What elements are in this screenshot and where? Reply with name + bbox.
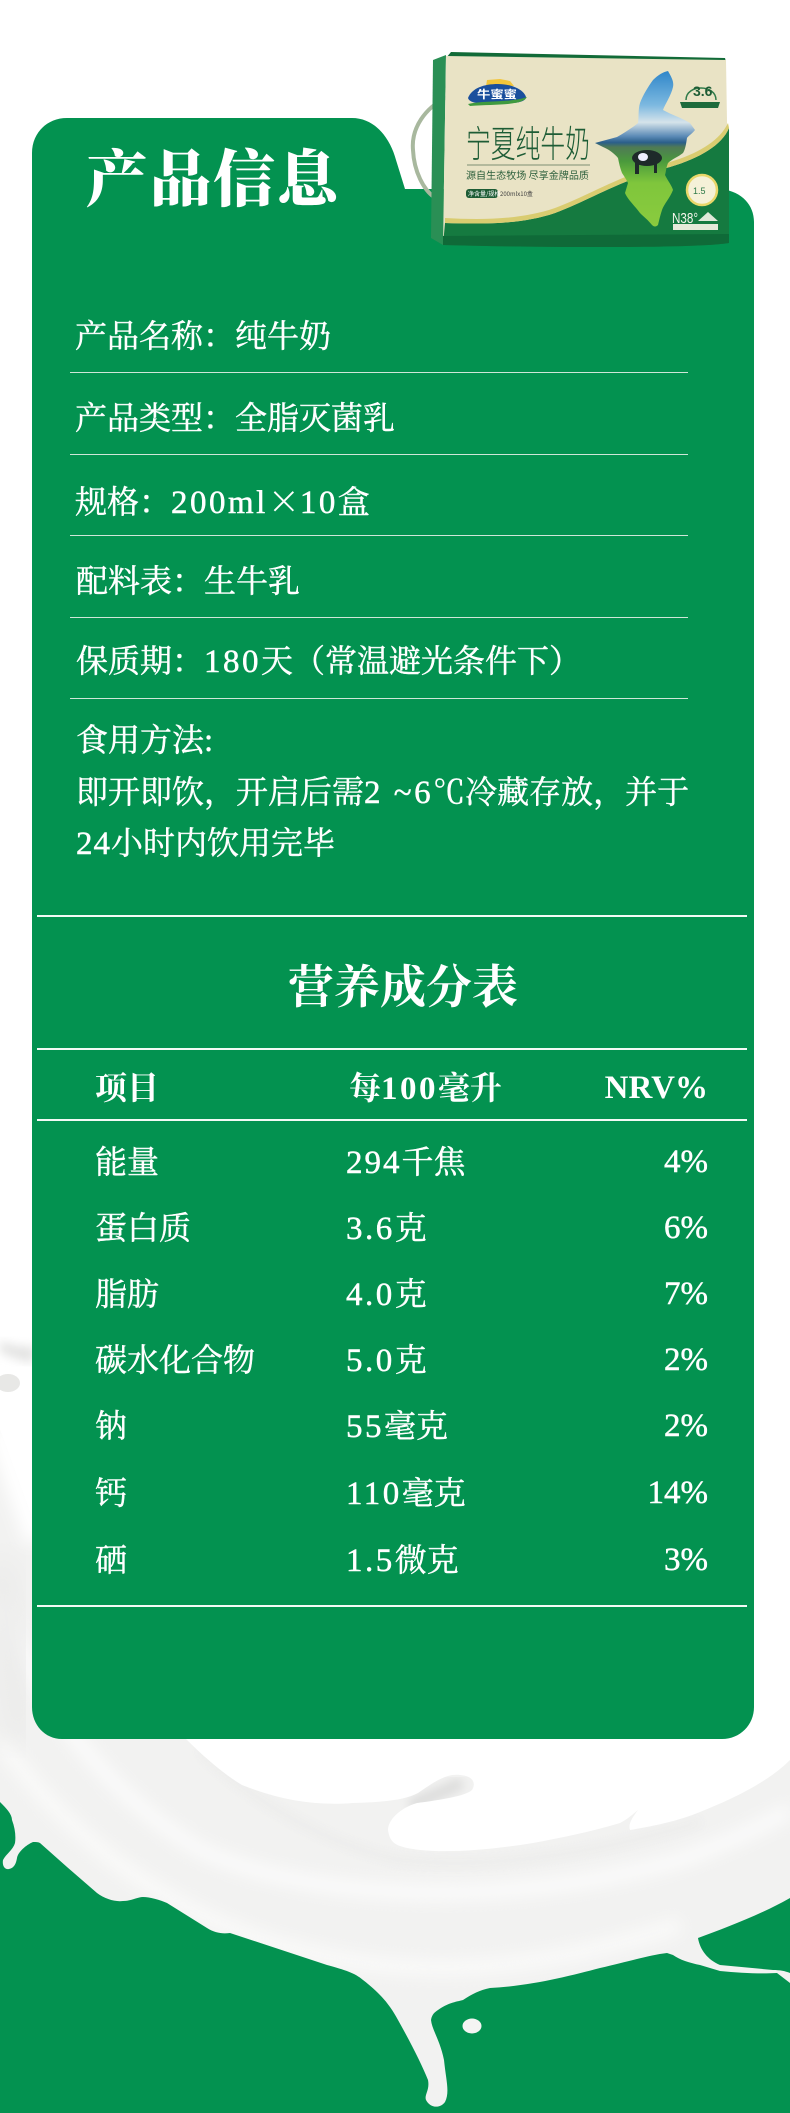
row: selenium: 3%: [664, 1542, 708, 1578]
row: selenium: [95, 1542, 708, 1579]
row: fat: 7%: [664, 1276, 708, 1312]
green ground, right wedge: [698, 1898, 790, 1973]
row: fat: [95, 1276, 708, 1313]
box logo: [468, 79, 527, 106]
row: protein: 3.6克: [346, 1210, 427, 1247]
row: sodium: 2%: [664, 1408, 708, 1444]
row: protein: 6%: [664, 1210, 708, 1246]
row: carbohydrate: 5.0克: [346, 1342, 427, 1379]
text block: specification: 规格：200ml×10盒: [75, 477, 370, 523]
table header: [95, 1070, 708, 1107]
row: sodium: 钠: [95, 1408, 127, 1444]
panel: product info card: [32, 118, 754, 1739]
box Ningxia map: [595, 71, 695, 226]
box N38 mark: N38°: [672, 210, 698, 227]
box gold stripe: [445, 123, 729, 224]
box net content tag: 净含量/规格: [468, 189, 500, 198]
box product name: 宁夏纯牛奶: [466, 114, 590, 168]
row: protein: 蛋白质: [95, 1210, 191, 1246]
row: selenium: 硒: [95, 1542, 127, 1578]
row: energy: 294千焦: [346, 1144, 466, 1181]
box side: [431, 55, 446, 245]
row: carbohydrate: 碳水化合物: [95, 1342, 255, 1378]
row: selenium: 1.5微克: [346, 1542, 459, 1579]
row: fat: 脂肪: [95, 1276, 159, 1312]
table header: NRV%: [605, 1070, 708, 1106]
milk splash background: [0, 1341, 790, 2113]
text block: how to consume: 即开即饮，开启后需2 ~6℃冷藏存放，并于: [76, 774, 689, 811]
box cow: [632, 150, 662, 174]
box green swoosh: [443, 128, 729, 247]
row: calcium: 110毫克: [346, 1475, 466, 1512]
heading: nutrition table: 营养成分表: [288, 962, 518, 1013]
row: sodium: 55毫克: [346, 1408, 448, 1445]
box net content tag: 200mlx10盒: [500, 189, 533, 198]
box logo: 牛蜜蜜: [477, 86, 517, 102]
box top edge: [446, 52, 726, 62]
box slogan: 源自生态牧场 尽享金牌品质: [466, 167, 589, 182]
box badge 3.6: 3.6: [693, 83, 713, 99]
row: fat: 4.0克: [346, 1276, 427, 1313]
row: protein: [95, 1210, 708, 1247]
text block: how to consume: 食用方法:: [76, 722, 216, 759]
table header: 项目: [95, 1070, 159, 1106]
box N38 mark: [672, 210, 718, 230]
text block: how to consume: [76, 722, 689, 862]
row: calcium: [95, 1475, 708, 1512]
row: energy: 4%: [664, 1144, 708, 1180]
box badge selenium: 1.5: [693, 186, 706, 196]
box badge selenium: [687, 175, 717, 205]
milk streak left: [0, 1341, 34, 1362]
row: calcium: 钙: [95, 1475, 127, 1511]
row: carbohydrate: 2%: [664, 1342, 708, 1378]
text block: shelf life: 保质期：180天（常温避光条件下）: [76, 643, 581, 680]
text block: how to consume: 24小时内饮用完毕: [76, 825, 335, 862]
text block: product type: 产品类型：全脂灭菌乳: [75, 400, 395, 436]
row: energy: 能量: [95, 1144, 159, 1180]
row: sodium: [95, 1408, 708, 1445]
table header: 每100毫升: [349, 1070, 502, 1107]
row: energy: [95, 1144, 708, 1181]
box handle: [413, 97, 447, 197]
row: carbohydrate: [95, 1342, 708, 1379]
box badge 3.6: [680, 83, 720, 108]
milk swirl: [0, 1425, 790, 2113]
milk droplet left: [0, 1374, 20, 1392]
row: calcium: 14%: [648, 1475, 708, 1511]
title: 产品信息: [86, 147, 340, 215]
icon: product box: [410, 52, 729, 247]
text block: ingredients: 配料表：生牛乳: [76, 563, 300, 599]
text block: product name: 产品名称：纯牛奶: [75, 318, 331, 354]
milk droplet bottom: [462, 2018, 482, 2034]
nutrition table: [37, 1070, 747, 1607]
green ground, lower: [0, 1802, 790, 2113]
box front: [443, 56, 729, 245]
box net content tag: [466, 189, 533, 198]
